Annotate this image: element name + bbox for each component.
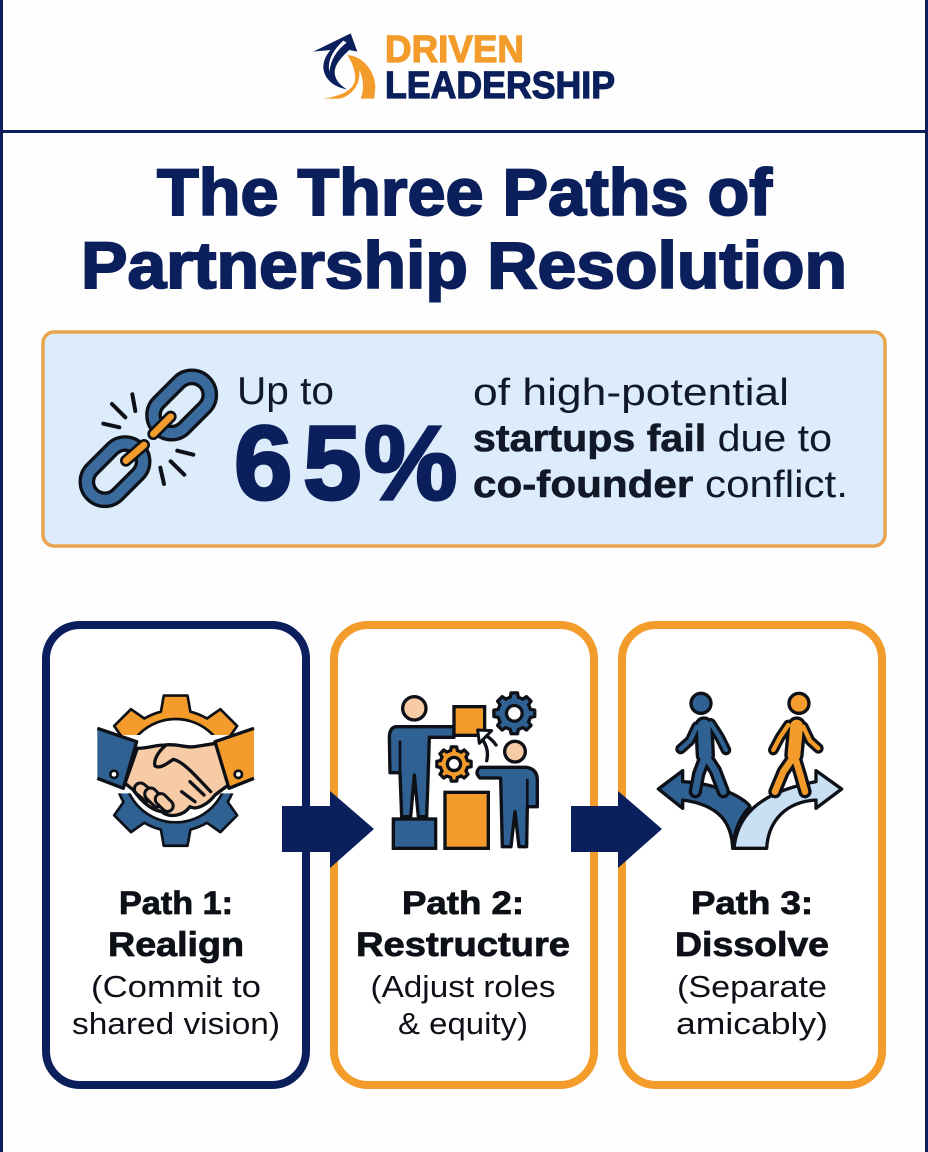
title: Partnership Resolution: [81, 228, 847, 302]
label: path 1: Realign: [108, 926, 244, 964]
arrow: path 1 to path 2: [282, 791, 374, 868]
stat description: startups fail due to: [473, 418, 832, 460]
icon: handshake and gears: [97, 696, 254, 846]
label: path 3: (Separate: [677, 969, 827, 1004]
panel: path 1: [46, 625, 306, 1085]
label: path 1: (Commit to: [91, 969, 261, 1004]
label: path 3: Path 3:: [691, 885, 813, 921]
panel: path 3: [622, 625, 882, 1085]
label: path 2: [356, 885, 570, 1041]
panel: path 2: [334, 625, 594, 1085]
label: path 3: amicably): [676, 1006, 828, 1041]
icon: restructure team: [389, 693, 537, 848]
label: path 1: [72, 885, 280, 1041]
panel: statistic callout: [43, 332, 885, 546]
label: path 3: Dissolve: [675, 926, 829, 964]
logo text: LEADERSHIP: LEADERSHIP: [385, 65, 615, 107]
icon: broken chain: [79, 369, 217, 507]
logo: [313, 29, 615, 107]
label: path 3: [675, 885, 829, 1041]
label: path 2: & equity): [398, 1006, 528, 1041]
label: path 1: shared vision): [72, 1006, 280, 1041]
title: The Three Paths of: [157, 155, 773, 229]
label: path 2: (Adjust roles: [370, 969, 556, 1004]
title: [81, 155, 847, 302]
stat description: [473, 372, 848, 506]
label: path 2: Path 2:: [402, 885, 524, 921]
stat description: co-founder conflict.: [473, 464, 848, 506]
icon: diverging paths: [658, 693, 842, 848]
label: path 1: Path 1:: [119, 885, 233, 921]
stat description: of high-potential: [473, 372, 789, 414]
logo text: DRIVEN: DRIVEN: [385, 29, 524, 71]
logo mark: [313, 33, 375, 99]
label: path 2: Restructure: [356, 926, 570, 964]
stat: 65%: 65%: [234, 405, 457, 522]
arrow: path 2 to path 3: [571, 791, 662, 868]
stat: up to: Up to: [237, 370, 334, 413]
